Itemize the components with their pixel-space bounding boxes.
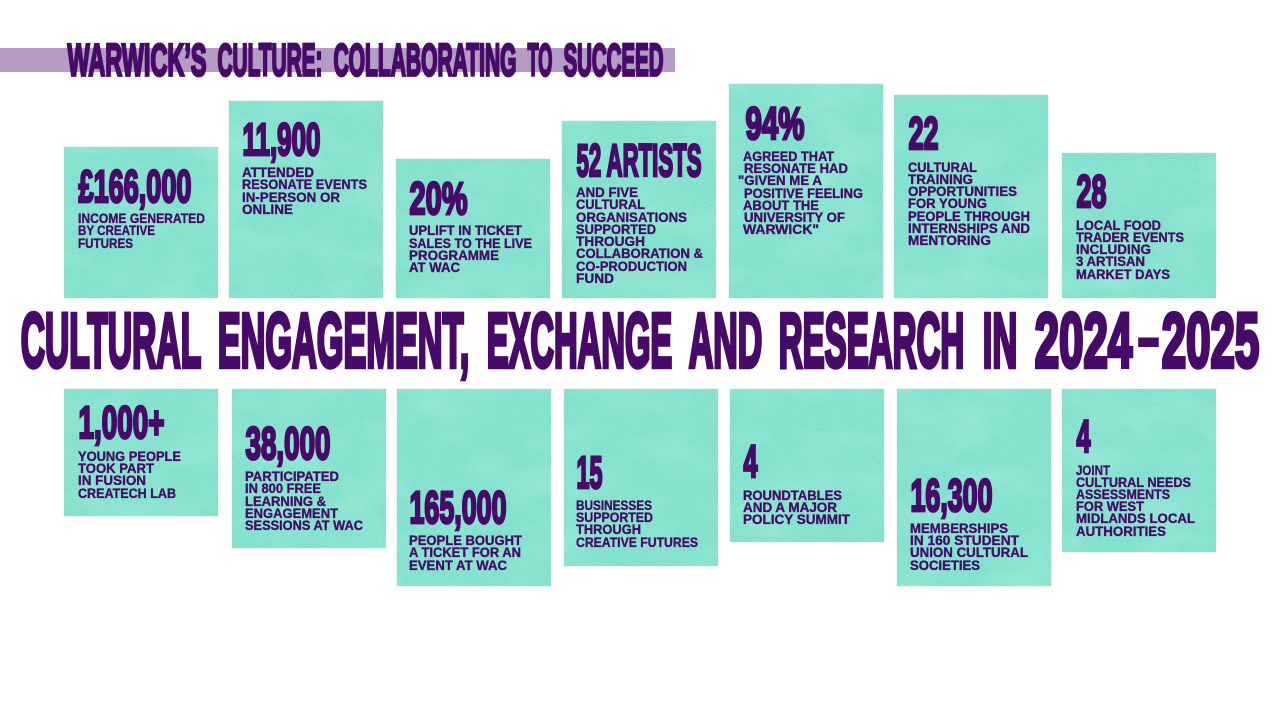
card: positive feeling: WARWICK" xyxy=(743,222,819,237)
card: learning sessions: ENGAGEMENT xyxy=(245,506,339,521)
card: learning sessions: PARTICIPATED xyxy=(245,469,339,484)
card: joint assessments: AUTHORITIES xyxy=(1076,524,1166,539)
card: local food trader events: TRADER EVENTS xyxy=(1076,230,1184,245)
card: artists supported: ORGANISATIONS xyxy=(576,210,687,225)
card: joint assessments: 4 xyxy=(1076,411,1090,462)
card: student memberships: 16,300 xyxy=(910,470,992,521)
card: ticket sales uplift xyxy=(396,159,550,298)
card: young people: YOUNG PEOPLE xyxy=(78,449,181,464)
card: training opportunities: TRAINING xyxy=(908,172,973,187)
card: training opportunities: 22 xyxy=(908,108,938,159)
card: artists supported: SUPPORTED xyxy=(576,222,656,237)
main heading: ENGAGEMENT, xyxy=(218,298,469,384)
card: artists supported: CULTURAL xyxy=(576,197,645,212)
card: positive feeling: POSITIVE FEELING xyxy=(744,186,863,201)
card: roundtables: ROUNDTABLES xyxy=(743,488,842,503)
card: positive feeling: AGREED THAT xyxy=(743,149,835,164)
card: student memberships: UNION CULTURAL xyxy=(910,545,1028,560)
card: businesses supported: CREATIVE FUTURES xyxy=(576,535,698,550)
card: artists supported: 52 ARTISTS xyxy=(576,135,702,186)
card: joint assessments: JOINT xyxy=(1076,463,1111,478)
card: roundtables xyxy=(730,389,884,542)
card: income generated: £166,000 xyxy=(78,161,192,212)
card: learning sessions: 38,000 xyxy=(246,418,330,469)
title banner: CULTURE: xyxy=(218,35,322,86)
card: student memberships: IN 160 STUDENT xyxy=(910,533,1020,548)
card: student memberships: MEMBERSHIPS xyxy=(910,521,1008,536)
card: training opportunities: PEOPLE THROUGH xyxy=(908,209,1030,224)
card: positive feeling: UNIVERSITY OF xyxy=(744,210,845,225)
card: learning sessions: LEARNING & xyxy=(245,494,326,509)
card: positive feeling xyxy=(729,84,883,298)
card: positive feeling: RESONATE HAD xyxy=(744,161,848,176)
title banner: TO xyxy=(528,35,552,86)
card: businesses supported: BUSINESSES xyxy=(576,498,652,513)
main heading: IN xyxy=(983,298,1017,384)
card: training opportunities: OPPORTUNITIES xyxy=(908,184,1017,199)
card: artists supported: THROUGH xyxy=(576,234,645,249)
main heading: 2024 xyxy=(1035,298,1132,384)
card: learning sessions xyxy=(232,389,386,548)
card: ticket sales uplift: UPLIFT IN TICKET xyxy=(409,223,523,238)
card: income generated: FUTURES xyxy=(78,236,133,251)
card: artists supported xyxy=(562,121,716,298)
card: businesses supported xyxy=(564,389,718,566)
card: businesses supported: THROUGH xyxy=(576,522,641,537)
card: income generated: BY CREATIVE xyxy=(78,223,155,238)
card: tickets bought: PEOPLE BOUGHT xyxy=(409,533,523,548)
card: income generated: INCOME GENERATED xyxy=(78,211,205,226)
card: roundtables: 4 xyxy=(744,436,758,487)
card: training opportunities: INTERNSHIPS AND xyxy=(908,221,1030,236)
card: artists supported: AND FIVE xyxy=(576,185,638,200)
card: young people: CREATECH LAB xyxy=(78,486,176,501)
card: joint assessments: FOR WEST xyxy=(1076,499,1145,514)
card: ticket sales uplift: SALES TO THE LIVE xyxy=(409,236,532,251)
card: young people: TOOK PART xyxy=(78,461,155,476)
card: training opportunities: CULTURAL xyxy=(908,160,977,175)
card: positive feeling: ABOUT THE xyxy=(743,198,819,213)
card: artists supported: CO-PRODUCTION xyxy=(576,259,687,274)
card: resonate attendance: ONLINE xyxy=(242,202,293,217)
card: student memberships xyxy=(897,389,1051,586)
card: resonate attendance: IN-PERSON OR xyxy=(242,190,340,205)
card: artists supported: COLLABORATION & xyxy=(576,246,703,261)
title banner: SUCCEED xyxy=(564,35,664,86)
main heading: AND xyxy=(689,298,762,384)
card: resonate attendance: 11,900 xyxy=(242,114,320,165)
card: tickets bought: EVENT AT WAC xyxy=(409,558,507,573)
card: roundtables: POLICY SUMMIT xyxy=(743,512,851,527)
card: local food trader events: 28 xyxy=(1076,166,1106,217)
card: joint assessments: ASSESSMENTS xyxy=(1076,487,1170,502)
card: training opportunities xyxy=(894,95,1048,298)
card: positive feeling: "GIVEN ME A xyxy=(738,173,822,188)
card: student memberships: SOCIETIES xyxy=(910,558,980,573)
main heading: RESEARCH xyxy=(779,298,964,384)
card: young people: IN FUSION xyxy=(78,473,146,488)
card: training opportunities: MENTORING xyxy=(908,233,991,248)
card: local food trader events: INCLUDING xyxy=(1076,242,1151,257)
card: tickets bought: A TICKET FOR AN xyxy=(409,545,521,560)
card: ticket sales uplift: 20% xyxy=(410,173,468,224)
card: joint assessments: CULTURAL NEEDS xyxy=(1076,475,1191,490)
card: joint assessments xyxy=(1062,389,1216,552)
title banner xyxy=(0,35,675,86)
title banner: WARWICK’S xyxy=(68,35,206,86)
card: tickets bought xyxy=(397,389,551,586)
card: local food trader events xyxy=(1062,153,1216,298)
card: local food trader events: 3 ARTISAN xyxy=(1076,254,1145,269)
card: resonate attendance: RESONATE EVENTS xyxy=(242,177,367,192)
card: local food trader events: LOCAL FOOD xyxy=(1076,218,1161,233)
card: young people xyxy=(64,389,218,516)
main heading xyxy=(21,291,1259,384)
card: businesses supported: 15 xyxy=(576,447,602,498)
card: young people: 1,000+ xyxy=(78,397,164,448)
main heading: CULTURAL xyxy=(21,298,201,384)
card: training opportunities: FOR YOUNG xyxy=(908,196,987,211)
card: local food trader events: MARKET DAYS xyxy=(1076,267,1170,282)
card: learning sessions: SESSIONS AT WAC xyxy=(245,518,363,533)
card: resonate attendance xyxy=(229,101,383,298)
main heading: EXCHANGE xyxy=(487,298,672,384)
card: roundtables: AND A MAJOR xyxy=(743,500,837,515)
card: ticket sales uplift: AT WAC xyxy=(409,260,460,275)
card: businesses supported: SUPPORTED xyxy=(576,510,653,525)
card: income generated xyxy=(64,147,218,298)
card: resonate attendance: ATTENDED xyxy=(242,165,314,180)
card: positive feeling: 94% xyxy=(746,98,804,149)
card: learning sessions: IN 800 FREE xyxy=(245,481,321,496)
title banner: COLLABORATING xyxy=(334,35,516,86)
card: ticket sales uplift: PROGRAMME xyxy=(409,248,499,263)
card: joint assessments: MIDLANDS LOCAL xyxy=(1076,511,1195,526)
main heading: - xyxy=(1135,291,1162,380)
card: tickets bought: 165,000 xyxy=(410,482,506,533)
card: artists supported: FUND xyxy=(576,271,614,286)
